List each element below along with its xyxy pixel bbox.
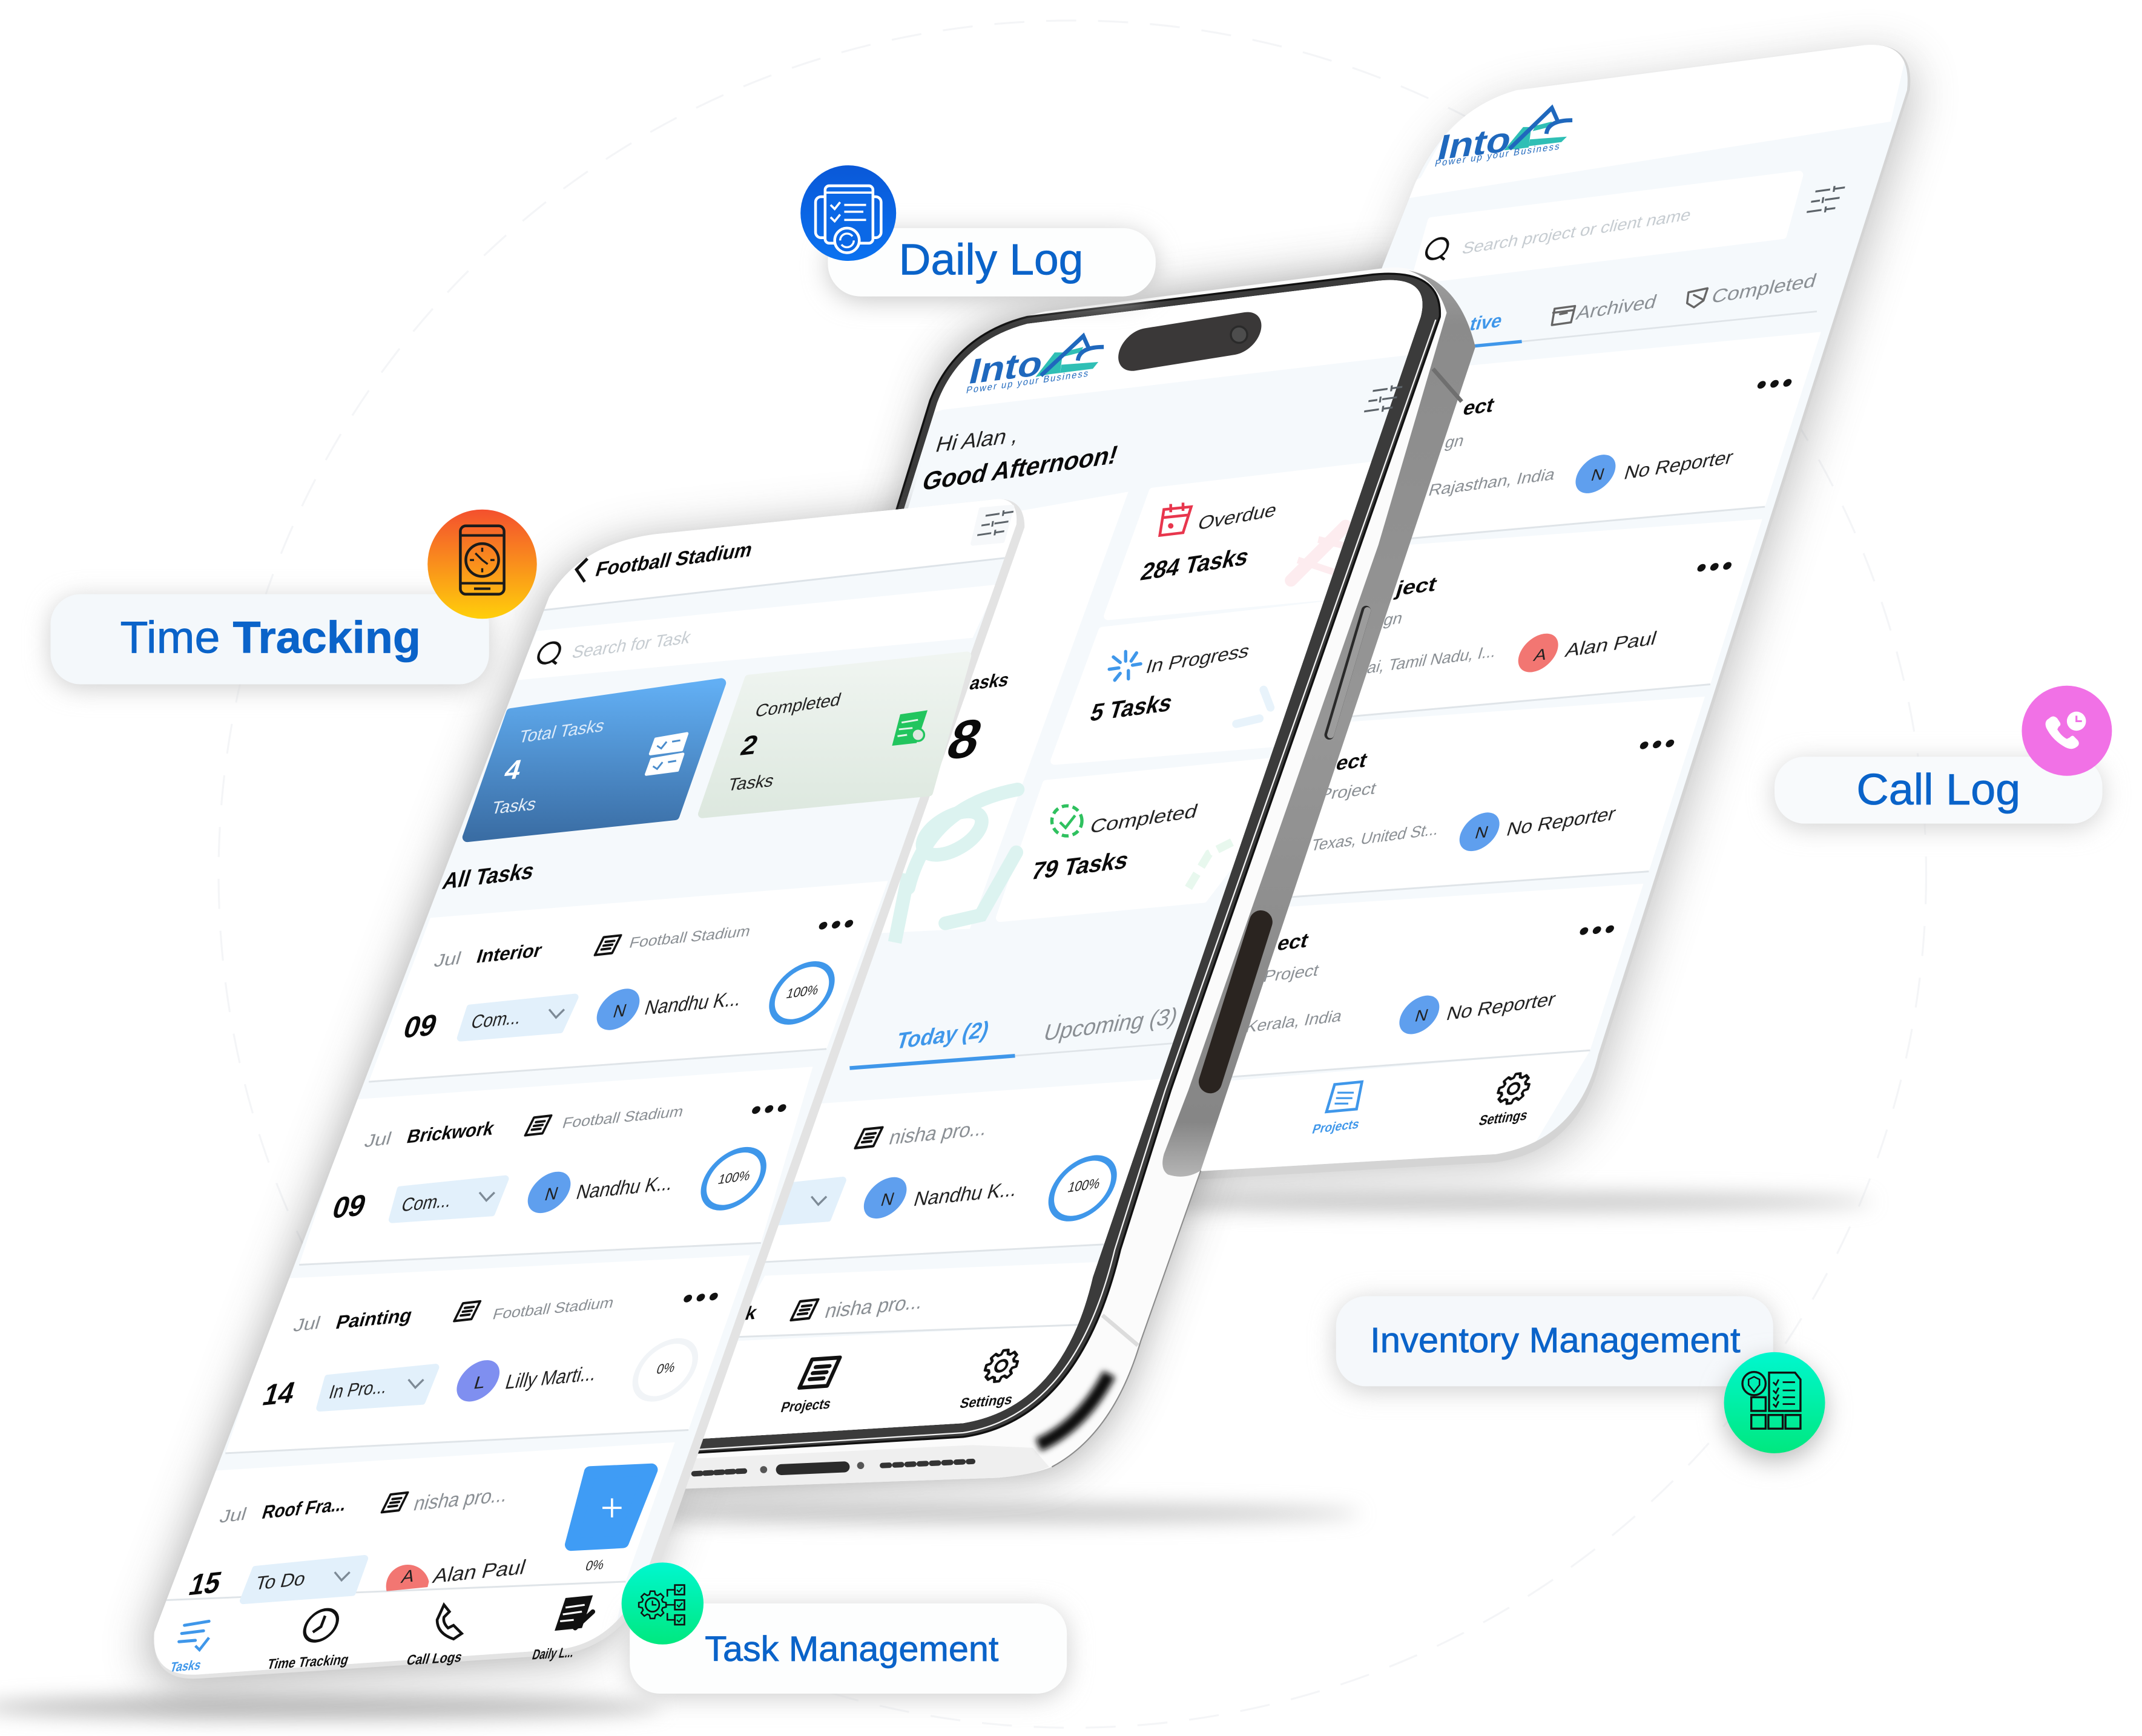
card: overdue: Overdue <box>1196 499 1280 534</box>
task: brickwork <box>329 1103 787 1225</box>
search bar: Search project or client name <box>1460 205 1693 258</box>
search: Search for Task <box>570 628 694 662</box>
tabs: today and upcoming: Upcoming (3) <box>1041 1003 1181 1046</box>
logo: Power up your Business <box>1434 140 1562 169</box>
card: total tasks: Tasks <box>489 794 539 818</box>
callout: inventory management <box>1336 1296 1825 1461</box>
row 2 text: ai, Tamil Nadu, I... <box>1365 642 1499 677</box>
task: painting: Painting <box>334 1304 415 1333</box>
card: completed tasks: Tasks <box>725 771 776 795</box>
task: painting: L <box>472 1372 488 1393</box>
row 3 text: Project <box>1317 779 1379 804</box>
floor shadows <box>0 1192 1871 1720</box>
logo: Into <box>1434 119 1516 168</box>
task: painting: 14 <box>259 1375 300 1412</box>
task: interior: N <box>611 1001 629 1022</box>
icon: daily log checklist <box>800 165 896 261</box>
card: completed tasks: 2 <box>737 729 762 761</box>
icon: task management <box>622 1562 704 1645</box>
dashed orbit ring <box>219 21 1926 1728</box>
task row: nisha project: Nandhu K... <box>911 1178 1020 1211</box>
card: completed: 79 Tasks <box>1029 846 1132 885</box>
row 1 text: Rajasthan, India <box>1426 465 1558 499</box>
bottom nav: Settings <box>1477 1107 1530 1129</box>
bottom ports and speakers <box>694 1461 973 1474</box>
task: interior: Nandhu K... <box>642 987 744 1019</box>
task: interior <box>400 919 854 1045</box>
task: roof framing: Jul <box>217 1504 249 1527</box>
side buttons <box>1210 611 1368 1082</box>
task rows <box>137 881 888 1694</box>
tabs: Archived <box>1574 291 1659 324</box>
button: add task <box>571 1470 651 1574</box>
bottom nav: Call Logs <box>404 1649 464 1668</box>
card: total tasks: Total Tasks <box>516 716 607 747</box>
task: brickwork: Jul <box>362 1129 394 1151</box>
watermark icons <box>895 526 1359 942</box>
task: brickwork: Brickwork <box>404 1117 498 1147</box>
row 4 text <box>1244 925 1615 1037</box>
task: interior: Jul <box>432 949 464 971</box>
task row: brickwork fragment: rk <box>735 1302 760 1325</box>
callout: task management: Task Management <box>705 1629 998 1669</box>
card: completed tasks <box>702 656 967 814</box>
task: painting: Football Stadium <box>491 1294 616 1323</box>
callout: call log: Call Log <box>1856 766 2020 814</box>
task: roof framing <box>185 1484 529 1602</box>
logo <box>1434 108 1572 169</box>
task: brickwork: 09 <box>329 1188 370 1225</box>
bottom nav: Daily L... <box>530 1645 576 1663</box>
task row: nisha project: 100% <box>1066 1175 1102 1196</box>
dynamic island <box>1114 309 1265 374</box>
bottom nav <box>779 1349 1021 1416</box>
task: brickwork: Nandhu K... <box>574 1172 676 1204</box>
card: in progress <box>1087 640 1253 726</box>
phone: dashboard screen (centre) <box>623 246 1475 1491</box>
card: completed: Completed <box>1087 800 1201 837</box>
card: in progress: In Progress <box>1144 640 1253 677</box>
logo <box>965 336 1104 396</box>
task: brickwork: N <box>542 1184 561 1205</box>
task: painting: In Pro... <box>326 1376 391 1402</box>
row 1 text: ect <box>1460 394 1497 420</box>
icon: inventory <box>1724 1352 1825 1461</box>
task: painting <box>259 1292 719 1412</box>
heading: all tasks: All Tasks <box>440 858 538 895</box>
task: painting: 0% <box>655 1359 677 1377</box>
task: interior: 09 <box>400 1008 441 1045</box>
task: interior: Interior <box>474 939 545 967</box>
row 3 text: N <box>1473 823 1491 842</box>
task row: nisha project: N <box>878 1189 897 1210</box>
bottom nav: Settings <box>958 1392 1015 1412</box>
callout: call log <box>1775 686 2112 827</box>
search band <box>516 585 997 680</box>
bezel <box>642 274 1440 1456</box>
row 1 text: gn <box>1443 431 1466 452</box>
button: add task: 0% <box>584 1556 606 1574</box>
row 3 text: ect <box>1333 749 1370 775</box>
callout: task management <box>622 1562 1067 1698</box>
card: total projects fragment <box>940 669 1012 771</box>
icon: filter <box>1364 384 1403 415</box>
callout: time tracking: Time Tracking <box>120 613 421 663</box>
tabs <box>1465 269 1819 347</box>
row 4 text: N <box>1413 1005 1431 1025</box>
stat cards <box>882 462 1371 933</box>
bottom nav <box>168 1596 593 1675</box>
app header <box>1409 45 1905 198</box>
tabs: today and upcoming <box>893 1003 1181 1054</box>
card: overdue <box>1138 499 1280 586</box>
bottom nav: Time Tracking <box>265 1652 351 1672</box>
row 1 text <box>1426 379 1793 499</box>
row 3 text: No Reporter <box>1504 803 1618 840</box>
row 4 text: Kerala, India <box>1244 1007 1345 1036</box>
bottom nav: Tasks <box>168 1657 203 1675</box>
bottom nav <box>1311 1072 1533 1137</box>
callout: daily log <box>800 165 1156 300</box>
card: total tasks: 4 <box>501 754 526 786</box>
icon: time tracking phone <box>427 510 537 619</box>
task: painting: Lilly Marti... <box>503 1363 599 1394</box>
task: painting: Jul <box>291 1314 323 1336</box>
card: in progress: 5 Tasks <box>1087 688 1176 726</box>
header: Football Stadium <box>593 539 756 581</box>
task: roof framing: A <box>399 1566 417 1587</box>
task row: brickwork fragment <box>735 1290 926 1325</box>
row 2 text: A <box>1532 645 1550 665</box>
logo: Into <box>965 343 1047 392</box>
callout: inventory management: Inventory Management <box>1370 1321 1741 1360</box>
tabs: tive <box>1468 310 1505 335</box>
card: completed <box>1029 800 1201 885</box>
project rows <box>1201 332 1821 1171</box>
callout: time tracking <box>50 510 537 688</box>
task: brickwork: 100% <box>716 1168 753 1187</box>
bottom band <box>683 1445 1049 1489</box>
card: total projects fragment: 8 <box>940 707 989 771</box>
header <box>576 507 1014 582</box>
task: roof framing: 15 <box>185 1565 225 1602</box>
phone: projects screen (back right) <box>1191 33 1935 1205</box>
task: roof framing: Alan Paul <box>430 1556 529 1588</box>
tabs: today and upcoming: Today (2) <box>893 1016 992 1054</box>
task: brickwork: Football Stadium <box>561 1103 685 1132</box>
row 4 text: ect <box>1274 929 1311 955</box>
greeting: Good Afternoon! <box>919 440 1122 496</box>
row 2 text: gn <box>1382 609 1405 629</box>
row 2 text: ject <box>1392 573 1440 600</box>
task row: nisha project <box>772 1117 1122 1223</box>
row 1 text: N <box>1589 465 1607 484</box>
date tabs band and task rows <box>642 1042 1188 1448</box>
bottom nav: Projects <box>779 1396 833 1416</box>
tabs: Completed <box>1709 269 1819 307</box>
row 1 text: No Reporter <box>1622 446 1736 484</box>
device frame <box>642 268 1475 1489</box>
task row: nisha project: nisha pro... <box>886 1117 990 1149</box>
search <box>535 628 694 666</box>
task: brickwork: Com... <box>399 1189 455 1215</box>
search bar <box>1415 175 1845 280</box>
row 3 text: Texas, United St... <box>1309 820 1442 855</box>
task: roof framing: To Do <box>253 1568 308 1594</box>
row 4 text: No Reporter <box>1444 988 1558 1024</box>
card: total tasks <box>467 683 721 837</box>
task: roof framing: Roof Fra... <box>260 1493 349 1523</box>
task: roof framing: nisha pro... <box>411 1484 511 1515</box>
task: interior: Football Stadium <box>627 923 753 952</box>
task: interior: 100% <box>785 982 820 1001</box>
icon: call log <box>2022 686 2112 776</box>
card: total projects fragment: asks <box>967 669 1012 694</box>
card: completed tasks: Completed <box>753 690 843 721</box>
row 3 text <box>1309 739 1675 855</box>
logo: Power up your Business <box>965 368 1090 396</box>
callout: daily log: Daily Log <box>899 236 1083 284</box>
greeting: Hi Alan , <box>933 422 1023 457</box>
header band <box>539 478 1038 611</box>
row 2 text: Alan Paul <box>1563 627 1659 661</box>
task: interior: Com... <box>469 1007 524 1033</box>
row 4 text: Project <box>1261 961 1322 985</box>
row 2 text <box>1365 562 1733 677</box>
card: overdue: 284 Tasks <box>1138 542 1253 586</box>
bottom nav: Projects <box>1311 1116 1362 1137</box>
phone: task list screen (front left) <box>137 478 1038 1694</box>
task row: brickwork fragment: nisha pro... <box>822 1290 926 1323</box>
